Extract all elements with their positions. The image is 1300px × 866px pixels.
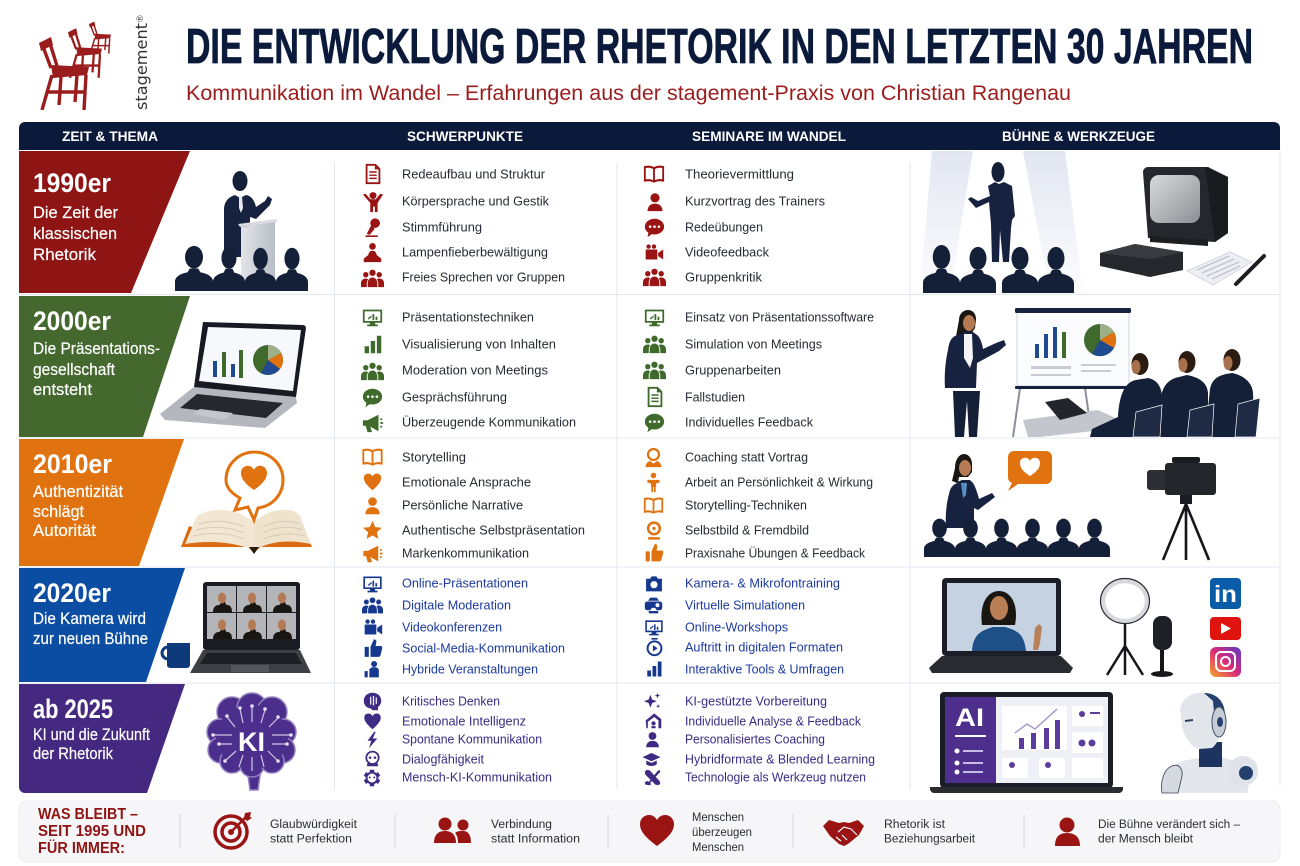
- table header bar: SCHWERPUNKTE: [407, 128, 523, 144]
- era band 2020er: [19, 568, 185, 682]
- era band 2000er: entsteht: [33, 381, 92, 399]
- item: Präsentationstechniken: [363, 310, 534, 326]
- illustration: laptop, ring light, microphone, social icons: [929, 578, 1241, 677]
- value: Verbindung: statt Information: [491, 834, 580, 846]
- item: Individuelle Analyse & Feedback: Individuelle Analyse & Feedback: [685, 714, 861, 728]
- era band 2020er: zur neuen Bühne: [33, 630, 148, 648]
- panel: Was bleibt: [19, 801, 1280, 862]
- era band 1990er: klassischen: [33, 225, 117, 243]
- item: Authentische Selbstpräsentation: Authentische Selbstpräsentation: [402, 522, 585, 538]
- item: Freies Sprechen vor Gruppen: [361, 270, 565, 287]
- item: Markenkommunikation: [363, 546, 529, 562]
- subtitle: Kommunikation im Wandel – Erfahrungen aus der stagement-Praxis von Christian Rangenau: [186, 82, 1071, 105]
- item: Storytelling-Techniken: Storytelling-Techniken: [685, 498, 807, 512]
- item: Fallstudien: [648, 387, 745, 407]
- illustration: laptop video grid and mug: [162, 582, 311, 673]
- item: Online-Workshops: [645, 620, 788, 635]
- item: Storytelling-Techniken: [644, 497, 807, 514]
- list: Seminare 2010er: [644, 448, 873, 561]
- item: Praxisnahe Übungen & Feedback: [646, 544, 865, 561]
- era band 2010er: Authentizität: [33, 483, 123, 501]
- item: Moderation von Meetings: Moderation von Meetings: [402, 362, 548, 378]
- item: Hybride Veranstaltungen: Hybride Veranstaltungen: [402, 662, 538, 676]
- item: Videofeedback: [646, 244, 769, 260]
- item: Virtuelle Simulationen: Virtuelle Simulationen: [685, 598, 805, 612]
- item: Coaching statt Vortrag: Coaching statt Vortrag: [685, 450, 808, 464]
- item: Selbstbild & Fremdbild: [647, 521, 809, 540]
- value: Beziehungsarbeit: Beziehungsarbeit: [884, 834, 976, 846]
- illustration: stage with speaker and spotlights: [920, 151, 1264, 293]
- item: Hybride Veranstaltungen: [365, 661, 538, 677]
- item: Lampenfieberbewältigung: [364, 243, 548, 262]
- item: Kamera- & Mikrofontraining: Kamera- & Mikrofontraining: [685, 576, 840, 590]
- item: Gruppenkritik: [643, 269, 762, 286]
- era band 2010er: [19, 439, 184, 566]
- item: Gruppenarbeiten: [643, 362, 781, 379]
- item: Gruppenkritik: Gruppenkritik: [685, 270, 762, 284]
- logo: stagement chairs: ®: [135, 15, 145, 22]
- table header bar: [19, 122, 1280, 150]
- era band 2010er: schlägt: [33, 503, 84, 521]
- item: Visualisierung von Inhalten: Visualisierung von Inhalten: [402, 336, 556, 352]
- item: Videokonferenzen: Videokonferenzen: [402, 620, 502, 634]
- logo: stagement chairs: [39, 15, 151, 110]
- item: Mensch-KI-Kommunikation: [364, 770, 552, 786]
- panel: 2000er: [19, 296, 1260, 437]
- era band ab 2025: ab 2025: [33, 694, 113, 724]
- item: Authentische Selbstpräsentation: [363, 521, 585, 539]
- logo: stagement chairs: stagement: [132, 23, 151, 110]
- item: Arbeit an Persönlichkeit & Wirkung: [647, 473, 873, 492]
- item: Dialogfähigkeit: [365, 751, 484, 766]
- item: Emotionale Ansprache: [364, 474, 531, 490]
- era band 1990er: [19, 151, 190, 293]
- item: Fallstudien: Fallstudien: [685, 390, 745, 404]
- item: Moderation von Meetings: [361, 362, 548, 380]
- item: Auftritt in digitalen Formaten: [647, 638, 843, 656]
- value: Menschen überzeugen Menschen: Menschen: [692, 812, 744, 824]
- item: Arbeit an Persönlichkeit & Wirkung: Arbeit an Persönlichkeit & Wirkung: [685, 474, 873, 490]
- era band 2010er: Autorität: [33, 522, 96, 540]
- item: Online-Workshops: Online-Workshops: [685, 620, 788, 634]
- list: Schwerpunkte ab 2025: [364, 693, 552, 786]
- heading: was bleibt: WAS BLEIBT –: [38, 806, 138, 823]
- illustration: AI dashboard laptop and robot: AI: [955, 704, 984, 732]
- item: Stimmführung: Stimmführung: [402, 220, 482, 234]
- list: Schwerpunkte 1990er: [361, 164, 565, 287]
- item: Persönliche Narrative: Persönliche Narrative: [402, 498, 523, 512]
- item: Emotionale Ansprache: Emotionale Ansprache: [402, 474, 531, 490]
- item: Präsentationstechniken: Präsentationstechniken: [402, 310, 534, 324]
- panel: 2020er: [19, 568, 1241, 682]
- era band 2000er: 2000er: [33, 306, 111, 336]
- item: Personalisiertes Coaching: Personalisiertes Coaching: [685, 732, 825, 746]
- item: Gesprächsführung: Gesprächsführung: [402, 390, 507, 404]
- value: Glaubwürdigkeit: statt Perfektion: [270, 834, 352, 846]
- panel: 1990er: [19, 151, 1264, 293]
- value: Beziehungsarbeit: Rhetorik ist: [884, 819, 946, 831]
- item: Digitale Moderation: Digitale Moderation: [402, 598, 511, 612]
- item: Überzeugende Kommunikation: [363, 414, 576, 432]
- item: Spontane Kommunikation: Spontane Kommunikation: [402, 732, 542, 746]
- item: Redeaufbau und Struktur: Redeaufbau und Struktur: [402, 166, 546, 182]
- item: Markenkommunikation: Markenkommunikation: [402, 546, 529, 560]
- illustration: speaker at lectern with audience: [175, 171, 308, 291]
- item: Selbstbild & Fremdbild: Selbstbild & Fremdbild: [685, 522, 809, 538]
- list: Schwerpunkte 2020er: [362, 576, 565, 677]
- value: Verbindung: Verbindung: [491, 819, 552, 831]
- item: Kritisches Denken: [364, 693, 500, 710]
- item: Social-Media-Kommunikation: Social-Media-Kommunikation: [402, 640, 565, 656]
- panel: 2010er: [19, 439, 1216, 566]
- item: Videofeedback: Videofeedback: [685, 244, 769, 260]
- value: Der Mensch bleibt: der Mensch bleibt: [1098, 834, 1194, 846]
- list: Seminare 2020er: [645, 576, 844, 676]
- value: Menschen überzeugen Menschen: überzeugen: [692, 827, 752, 839]
- item: Spontane Kommunikation: [368, 732, 542, 748]
- item: Kurzvortrag des Trainers: Kurzvortrag des Trainers: [685, 194, 825, 208]
- era band 2000er: [19, 296, 190, 437]
- value: Glaubwürdigkeit: Glaubwürdigkeit: [270, 819, 358, 831]
- item: Redeaufbau und Struktur: [366, 164, 546, 184]
- value: Glaubwürdigkeit: [215, 812, 358, 848]
- item: Theorievermittlung: [644, 166, 794, 183]
- item: Lampenfieberbewältigung: Lampenfieberbewältigung: [402, 244, 548, 260]
- item: Technologie als Werkzeug nutzen: Technologie als Werkzeug nutzen: [685, 770, 866, 784]
- item: Kritisches Denken: Kritisches Denken: [402, 694, 500, 708]
- item: Simulation von Meetings: Simulation von Meetings: [685, 336, 822, 352]
- illustration: KI brain: KI: [238, 727, 265, 757]
- item: Storytelling: [362, 449, 466, 466]
- item: Emotionale Intelligenz: Emotionale Intelligenz: [402, 714, 526, 728]
- item: Coaching statt Vortrag: [646, 448, 808, 467]
- item: Redeübungen: Redeübungen: [685, 220, 763, 234]
- item: Dialogfähigkeit: Dialogfähigkeit: [402, 752, 484, 766]
- illustration: laptop, ring light, microphone, social icons: in: [1214, 581, 1237, 607]
- item: Visualisierung von Inhalten: [365, 336, 556, 353]
- item: Auftritt in digitalen Formaten: Auftritt in digitalen Formaten: [685, 640, 843, 654]
- era band ab 2025: der Rhetorik: [33, 745, 114, 763]
- item: Theorievermittlung: Theorievermittlung: [685, 166, 794, 182]
- heading: was bleibt: [38, 806, 146, 857]
- item: Stimmführung: [366, 218, 482, 237]
- item: Praxisnahe Übungen & Feedback: Praxisnahe Übungen & Feedback: [685, 546, 865, 560]
- value: Beziehungsarbeit: [823, 819, 976, 846]
- era band 1990er: Rhetorik: [33, 246, 97, 264]
- heading: was bleibt: SEIT 1995 UND: [38, 823, 146, 840]
- item: Individuelles Feedback: Individuelles Feedback: [685, 414, 813, 430]
- item: Redeübungen: [645, 219, 763, 237]
- item: Überzeugende Kommunikation: Überzeugende Kommunikation: [402, 414, 576, 430]
- item: Mensch-KI-Kommunikation: Mensch-KI-Kommunikation: [402, 770, 552, 784]
- item: Freies Sprechen vor Gruppen: Freies Sprechen vor Gruppen: [402, 270, 565, 284]
- item: Simulation von Meetings: [643, 336, 822, 353]
- item: Online-Präsentationen: [363, 576, 528, 592]
- list: Schwerpunkte 2000er: [361, 310, 576, 432]
- item: Körpersprache und Gestik: Körpersprache und Gestik: [402, 194, 549, 208]
- illustration: presenter, audience, video camera: [924, 451, 1216, 560]
- item: Individuelles Feedback: [645, 414, 813, 432]
- era band 2020er: Die Kamera wird: [33, 610, 146, 628]
- item: Körpersprache und Gestik: [363, 192, 549, 212]
- item: Persönliche Narrative: [365, 497, 523, 514]
- item: Einsatz von Präsentationssoftware: Einsatz von Präsentationssoftware: [685, 310, 874, 324]
- era band ab 2025: KI und die Zukunft: [33, 726, 150, 744]
- item: KI-gestützte Vorbereitung: KI-gestützte Vorbereitung: [685, 694, 827, 708]
- era band 1990er: Die Zeit der: [33, 204, 119, 222]
- era band 2010er: 2010er: [33, 449, 112, 479]
- illustration: book with heart speech bubble: [181, 452, 312, 554]
- value: Der Mensch bleibt: [1055, 818, 1241, 846]
- illustration: AI dashboard laptop and robot: [930, 692, 1258, 793]
- item: Gruppenarbeiten: Gruppenarbeiten: [685, 362, 781, 378]
- value: Menschen überzeugen Menschen: [640, 812, 752, 854]
- era band 2020er: 2020er: [33, 578, 111, 608]
- item: Social-Media-Kommunikation: [365, 639, 565, 657]
- era band 2000er: gesellschaft: [33, 361, 115, 379]
- era band ab 2025: [19, 684, 185, 793]
- item: Virtuelle Simulationen: [645, 598, 805, 613]
- item: Kurzvortrag des Trainers: [648, 193, 825, 211]
- item: Gesprächsführung: [363, 389, 507, 407]
- table header bar: BÜHNE & WERKZEUGE: [1002, 128, 1155, 144]
- table header bar: SEMINARE IM WANDEL: [692, 128, 846, 144]
- list: Seminare 1990er: [643, 166, 825, 286]
- list: Schwerpunkte 2010er: [362, 449, 585, 562]
- era band 1990er: 1990er: [33, 168, 111, 198]
- item: Digitale Moderation: [362, 597, 511, 613]
- list: Seminare 2000er: [643, 310, 874, 432]
- illustration: presenter at flipchart with seated listeners: [945, 308, 1260, 437]
- value: Der Mensch bleibt: Die Bühne verändert sich –: [1098, 819, 1241, 831]
- value: Verbindung: [434, 818, 580, 846]
- panel: ab 2025: [19, 684, 1258, 793]
- item: Storytelling: Storytelling: [402, 450, 466, 464]
- era band 2000er: Die Präsentations-: [33, 340, 160, 358]
- illustration: KI brain: [207, 693, 296, 790]
- value: Menschen überzeugen Menschen: Menschen: [692, 842, 744, 854]
- illustration: laptop with charts: [160, 322, 306, 428]
- list: Seminare ab 2025: [642, 693, 875, 785]
- heading: was bleibt: FÜR IMMER:: [38, 840, 125, 857]
- item: Online-Präsentationen: Online-Präsentationen: [402, 576, 528, 590]
- table header bar: ZEIT & THEMA: [62, 128, 158, 144]
- item: Interaktive Tools & Umfragen: Interaktive Tools & Umfragen: [685, 662, 844, 676]
- item: Hybridformate & Blended Learning: Hybridformate & Blended Learning: [685, 752, 875, 766]
